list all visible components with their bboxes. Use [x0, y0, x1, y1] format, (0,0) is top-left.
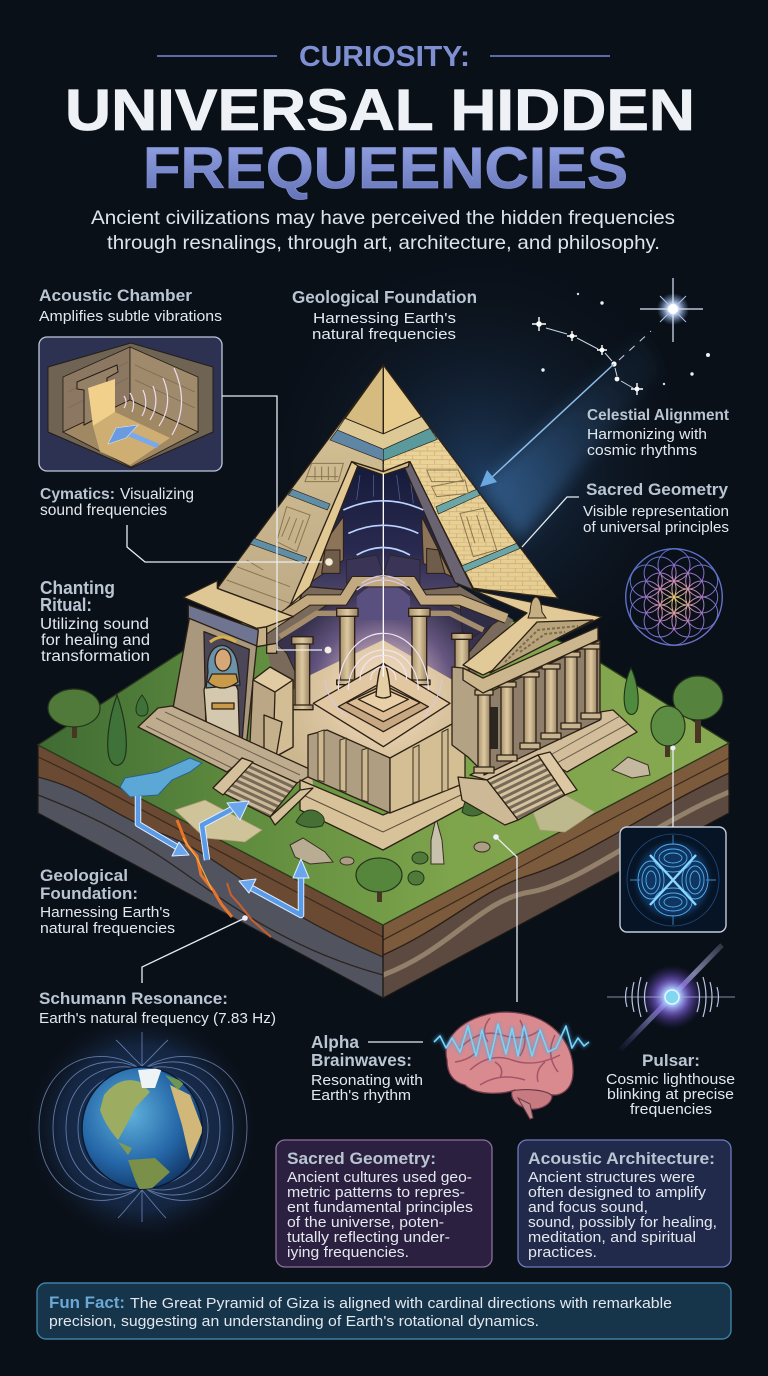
globe: [82, 1067, 203, 1195]
foundation wall right: [390, 724, 465, 813]
roof statue: [528, 597, 546, 618]
stone path right: [530, 795, 595, 832]
panel body: and focus sound,: [528, 1199, 648, 1216]
hall floor: [250, 640, 470, 785]
hieroglyph panels: [227, 463, 497, 603]
fun fact body: The Great Pyramid of Giza is aligned with cardinal directions with remarkable: [130, 1295, 672, 1312]
pyramid left face: [217, 365, 383, 617]
panel body: sound, possibly for healing,: [528, 1214, 717, 1231]
label: chanting ritual: for healing and: [41, 632, 150, 649]
alpha wave: [434, 1024, 589, 1060]
right strata face: [383, 743, 729, 998]
pyramid frame edges: [257, 462, 473, 628]
brain: [434, 1012, 589, 1119]
panel body: of the universe, poten-: [287, 1214, 444, 1231]
panel body: practices.: [528, 1244, 597, 1261]
callout: alpha dash: [368, 1041, 423, 1043]
panel body: metric patterns to repres-: [287, 1184, 465, 1201]
central dais: [313, 663, 450, 747]
temple side wall: [452, 667, 483, 772]
foundation wall left: [308, 730, 390, 813]
steps and foundation: [138, 706, 637, 850]
bright star: [640, 278, 703, 342]
callout: alpha brainwaves: [493, 834, 517, 1002]
tree right large: [673, 676, 723, 743]
trees and rocks: [48, 668, 723, 902]
bushes beside stairs: [296, 810, 324, 827]
resonance waves: [325, 473, 442, 717]
tree front: [356, 858, 402, 902]
label: geological foundation left: Foundation:: [40, 884, 138, 903]
callout: schumann: [142, 915, 248, 983]
label: chanting ritual: Ritual:: [40, 595, 92, 615]
temple columns: [474, 644, 601, 773]
subtitle: through resnalings, through art, architecture, and philosophy.: [107, 232, 660, 254]
label: pulsar: Pulsar:: [642, 1051, 700, 1070]
earth block cross-section: [38, 565, 729, 998]
chamber room: [48, 343, 213, 468]
label: pulsar: Cosmic lighthouse: [606, 1071, 735, 1088]
tree left: [48, 689, 100, 738]
inset: acoustic chamber: [39, 337, 222, 471]
pyramid and hall building: [173, 365, 558, 785]
panel body: often designed to amplify: [528, 1184, 707, 1201]
label: schumann resonance: Earth's natural frequency (7.83 Hz): [39, 1010, 276, 1027]
arrow: fault up to stairs: [202, 801, 249, 860]
label: chanting ritual: transformation: [41, 648, 150, 665]
label: cymatics: sound frequencies: [40, 502, 167, 519]
panel: sacred geometry: [276, 1140, 492, 1267]
stone path left: [175, 800, 262, 842]
label: cymatics: Visualizing: [120, 486, 194, 503]
label: celestial alignment: Celestial Alignment: [587, 407, 729, 424]
left strata face: [38, 745, 383, 998]
label: sacred geometry right: of universal principles: [583, 519, 729, 536]
celestial alignment: star and constellation: [480, 278, 710, 540]
flower of life: [626, 549, 722, 645]
earth with magnetic field: [38, 1026, 248, 1230]
panel: fun fact: [37, 1283, 731, 1339]
panel body: iying frequencies.: [287, 1244, 409, 1261]
chamber arrow: [108, 425, 158, 446]
panel heading: Acoustic Architecture:: [528, 1149, 715, 1168]
grass top: [38, 565, 729, 925]
title block: [65, 41, 695, 254]
fun fact label: Fun Fact:: [49, 1293, 125, 1312]
label: alpha brainwaves: Earth's rhythm: [311, 1087, 411, 1104]
upper chamber: [308, 466, 458, 590]
central base: [300, 780, 465, 850]
pulsar icon: [607, 945, 735, 1050]
alignment arrow: [480, 364, 614, 487]
panel body: tutally reflecting under-: [287, 1229, 450, 1246]
label: celestial alignment: cosmic rhythms: [587, 442, 697, 459]
fissure: [177, 820, 271, 937]
label: geological foundation left: Geological: [40, 866, 128, 885]
left stairs: [213, 758, 313, 825]
label: schumann resonance: Schumann Resonance:: [39, 989, 228, 1008]
label: alpha brainwaves: Brainwaves:: [311, 1050, 412, 1070]
small shrub: [136, 695, 148, 716]
panel heading: Sacred Geometry:: [287, 1149, 436, 1168]
label: geological foundation top: natural frequencies: [312, 326, 456, 343]
arrow: river to fault: [138, 796, 189, 856]
label: pulsar: frequencies: [630, 1101, 712, 1118]
wall pilasters: [318, 729, 448, 803]
inset: blue cymatic sphere: [620, 827, 726, 932]
callout: acoustic chamber: [222, 396, 332, 654]
temple roof: [463, 590, 602, 675]
label: pulsar: blinking at precise: [607, 1086, 734, 1103]
temple interior wall: [483, 640, 600, 775]
right step base: [470, 710, 637, 780]
label: acoustic chamber: Acoustic Chamber: [39, 286, 192, 305]
callout: sphere inset: [670, 746, 676, 827]
label: alpha brainwaves: Alpha: [311, 1032, 359, 1052]
tree right small: [651, 706, 685, 757]
left step base: [138, 706, 316, 783]
left shrine: [173, 581, 293, 758]
pyramid bands: [250, 428, 520, 573]
magnetic field lines: [39, 1032, 247, 1222]
chamber sound waves: [124, 368, 182, 435]
label: alpha brainwaves: Resonating with: [311, 1072, 423, 1089]
label: geological foundation left: natural frequencies: [40, 921, 175, 937]
hall columns: [292, 608, 472, 710]
panel body: ent fundamental principles: [287, 1199, 473, 1216]
label: cymatics: Cymatics:: [40, 486, 115, 503]
pharaoh figure: [204, 637, 240, 760]
flow arrows: [138, 796, 309, 915]
panel body: Ancient cultures used geo-: [287, 1169, 472, 1186]
pyramid right face: [383, 365, 558, 598]
fun fact body: precision, suggesting an understanding of Earth's rotational dynamics.: [49, 1313, 539, 1330]
label: chanting ritual: Utilizing sound: [40, 616, 149, 633]
subtitle: Ancient civilizations may have perceived the hidden frequencies: [91, 207, 675, 229]
label: geological foundation top: Geological Foundation: [292, 287, 477, 307]
temple pediment: [490, 620, 593, 673]
lower hall: [257, 577, 507, 748]
label: geological foundation left: Harnessing Earth's: [40, 905, 170, 921]
river: [120, 758, 202, 797]
callout lines: [127, 396, 676, 1042]
main title line 2: FREQUEENCIES: [143, 136, 628, 201]
label: acoustic chamber: Amplifies subtle vibrations: [39, 309, 222, 325]
label: chanting ritual: Chanting: [40, 578, 115, 598]
label: sacred geometry right: Sacred Geometry: [586, 480, 729, 499]
label: geological foundation top: Harnessing Earth's: [313, 310, 456, 327]
callout: sacred geometry: [522, 497, 579, 547]
standing stone: [431, 818, 444, 864]
structure backing: [263, 547, 513, 750]
label: celestial alignment: Harmonizing with: [587, 426, 707, 443]
temple entablature: [463, 627, 598, 693]
broken wall: [250, 667, 293, 758]
main title line 1: UNIVERSAL HIDDEN: [65, 78, 695, 143]
callout: cymatics: [127, 525, 333, 566]
cypress right: [624, 668, 638, 714]
label: sacred geometry right: Visible representation: [583, 503, 729, 520]
panel body: meditation, and spiritual: [528, 1229, 696, 1246]
panel: acoustic architecture: [518, 1140, 731, 1267]
right stairs: [458, 752, 577, 825]
sky glow behind pyramid: [250, 240, 768, 700]
eyebrow: curiosity: CURIOSITY:: [299, 41, 470, 73]
pyramid capstone: [337, 365, 430, 449]
greek temple: [452, 590, 602, 775]
cypress left: [108, 695, 126, 765]
rocks: [290, 838, 333, 864]
panel body: Ancient structures were: [528, 1169, 695, 1186]
arrow: fault to surface: [239, 859, 309, 915]
